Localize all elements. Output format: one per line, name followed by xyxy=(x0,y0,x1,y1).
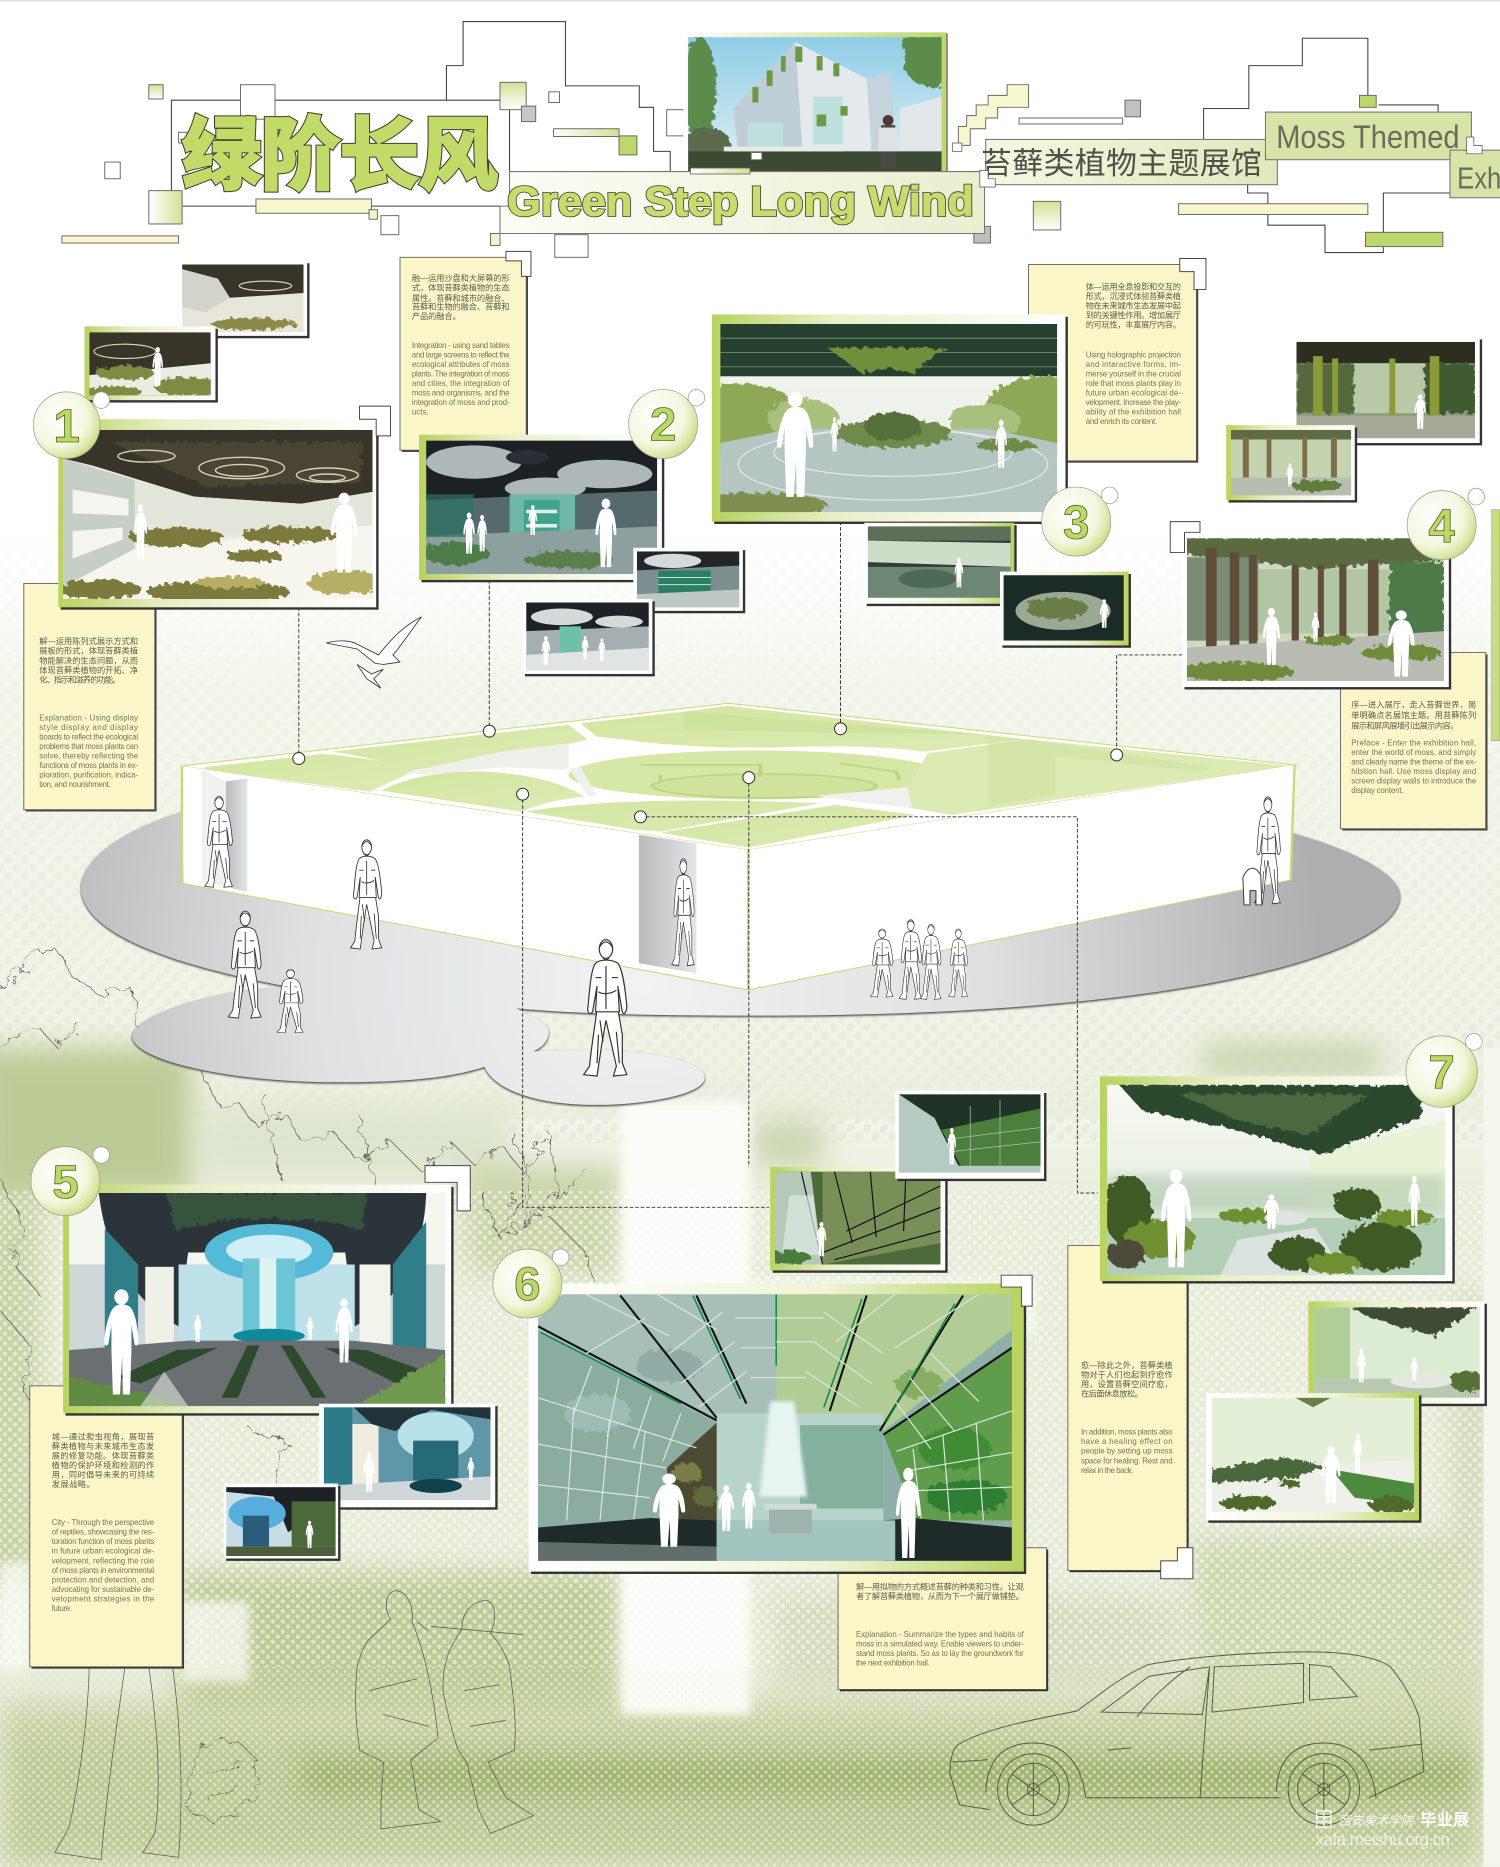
figure: man from behind xyxy=(351,840,382,949)
subtitle: Chinese: 苔藓类植物主题展馆 xyxy=(981,146,1262,181)
panel 2: integration xyxy=(400,251,745,676)
text box 2: integration of moss and prod- xyxy=(412,398,510,407)
text box 3: 的可玩性，丰富展厅内容。 xyxy=(1086,320,1181,330)
subtitle: Moss Themed: Moss Themed xyxy=(1276,119,1460,155)
text box 4: and clearly name the theme of the ex- xyxy=(1351,757,1477,766)
small image: forest hall xyxy=(1292,337,1482,445)
text box 5: toration function of moss plants xyxy=(52,1537,154,1546)
text box 5: of reptiles, showcasing the res- xyxy=(52,1528,155,1537)
corner tab xyxy=(425,1166,470,1211)
text box 5: 藓类植物与未来城市生态发 xyxy=(52,1441,154,1451)
text box 3: role that moss plants play in xyxy=(1086,379,1181,388)
panel 1: explanation xyxy=(24,261,390,811)
text box 5: of moss plants in environmental xyxy=(52,1566,154,1575)
text box 2: 融—运用沙盘和大屏幕的形 xyxy=(412,273,510,283)
line art: bush xyxy=(188,1736,260,1824)
watermark xyxy=(1315,1811,1469,1849)
text box 1: 化、指示和滋养的功能。 xyxy=(39,674,120,684)
title: English: Green Step Long Wind xyxy=(507,178,974,225)
badge 4: 4 xyxy=(1428,500,1455,553)
badge 3 xyxy=(1042,487,1118,556)
text box 7: 愈—除此之外，苔藓类植 xyxy=(1081,1360,1173,1370)
subtitle band: Moss Themed xyxy=(1265,112,1471,160)
walls xyxy=(182,765,1295,990)
badge 7 xyxy=(1406,1034,1482,1107)
text box 3: and enrich its content. xyxy=(1086,417,1157,426)
badge 4 xyxy=(1407,488,1485,560)
text box 1: 物能解决的生态问题，从而 xyxy=(39,655,138,665)
badge 6: 6 xyxy=(514,1258,541,1311)
subtitle band: Chinese xyxy=(986,139,1277,185)
badge 2: 2 xyxy=(650,399,676,452)
line art: car xyxy=(950,1652,1424,1825)
text box 5: in future urban ecological de- xyxy=(52,1547,155,1556)
title band: English xyxy=(500,172,985,234)
text box 6: 者了解苔藓类植物，从而为下一个展厅做铺垫。 xyxy=(856,1591,1024,1601)
exhibition hall isometric model xyxy=(182,703,1295,990)
title: Chinese: 绿阶长风 xyxy=(182,111,498,199)
text box 3: Using holographic projection xyxy=(1086,350,1181,359)
figure: woman in doorway xyxy=(672,859,694,966)
small image: round bed xyxy=(1000,572,1131,648)
text box 7: In addition, moss plants also xyxy=(1081,1428,1173,1437)
text box 5: advocating for sustainable de- xyxy=(52,1585,155,1594)
panel 7: healing xyxy=(1068,1034,1487,1579)
text box 4: enter the world of moss, and simply xyxy=(1351,748,1476,757)
small image: corridor xyxy=(224,1484,340,1561)
figure: walker at left door xyxy=(205,796,232,887)
text box 2: 苔藓和生物的融合、苔藓和 xyxy=(412,302,510,312)
text box 3: future urban ecological de- xyxy=(1086,388,1181,397)
text box 1: style display and display xyxy=(39,723,138,732)
figure: child xyxy=(277,969,303,1033)
text box 5: velopment, reflecting the role xyxy=(52,1556,155,1565)
text box 3: merse yourself in the crucial xyxy=(1086,369,1181,378)
text box 5 xyxy=(30,1386,184,1669)
corner tab xyxy=(1170,522,1200,553)
text box 3: 体—运用全息投影和交互的 xyxy=(1086,281,1181,291)
text box 3 xyxy=(1029,264,1198,463)
text box 1: tion, and nourishment. xyxy=(39,780,111,789)
small image: gallery xyxy=(179,261,310,338)
text box 5: velopment strategies in the xyxy=(52,1594,155,1603)
text box 7: have a healing effect on xyxy=(1081,1437,1173,1446)
text box 4: 序—进入展厅，走入苔藓世界，简 xyxy=(1351,699,1476,709)
text box 1: ploration, purification, indica- xyxy=(39,771,138,780)
text box 2: and cities, the integration of xyxy=(412,379,510,388)
text box 2: 产品的融合。 xyxy=(412,311,461,321)
line art: two figures with pole xyxy=(356,1591,533,1834)
tree line art xyxy=(0,947,595,1512)
text box 5: 用，同时倡导未来的可持续 xyxy=(52,1470,154,1480)
small image: sand table xyxy=(633,548,745,613)
text box 2: and large screens to reflect the xyxy=(412,350,510,359)
text box 3: ability of the exhibition hall xyxy=(1086,407,1181,416)
text box 7: space for healing. Rest and xyxy=(1081,1456,1173,1465)
text box 7: relax in the back. xyxy=(1081,1466,1133,1475)
corner tab xyxy=(1161,1548,1193,1579)
watermark: 毕业展 xyxy=(1420,1811,1469,1829)
small image: white room xyxy=(1308,1301,1487,1406)
panel 6: explanation greenhouse xyxy=(493,1091,1048,1691)
foreground line drawings xyxy=(55,1591,1424,1860)
text box 2: ecological attributes of moss xyxy=(412,360,510,369)
text box 6 xyxy=(838,1548,1048,1691)
small image: moss lounge xyxy=(1206,1393,1421,1523)
badge 5: 5 xyxy=(52,1156,79,1209)
watermark: 西安美术学院 xyxy=(1338,1814,1416,1828)
figure: man with dog xyxy=(1243,797,1280,905)
text box 5: protection and detection, and xyxy=(52,1575,154,1584)
panel 5: city xyxy=(30,1147,498,1669)
watermark: xafa.meishu.org.cn xyxy=(1315,1829,1450,1849)
text box 2: Integration - using sand tables xyxy=(412,341,510,350)
dashed leader lines xyxy=(293,522,1182,1207)
small image: greenhouse detail xyxy=(768,1167,948,1273)
text box 5: future. xyxy=(52,1604,72,1613)
subtitle band: Exhibition xyxy=(1450,150,1500,198)
corner tab xyxy=(1180,258,1206,289)
text box 1: functions of moss plants in ex- xyxy=(39,761,138,770)
small image: column walk xyxy=(1226,425,1357,503)
image: main hall 6 xyxy=(529,1284,1026,1574)
figure: children group xyxy=(871,920,968,999)
image: main hall 4 xyxy=(1175,534,1451,689)
corner tab xyxy=(506,251,531,276)
text box 3: velopment. Increase the play- xyxy=(1086,398,1181,407)
image: main hall 7 xyxy=(1100,1076,1455,1284)
text box 6: 解—用拟物的方式概述苔藓的种类和习性。让观 xyxy=(856,1581,1024,1591)
text box 1: solve, thereby reflecting the xyxy=(39,751,139,760)
small image: greenhouse wall xyxy=(895,1091,1046,1181)
roof plan xyxy=(182,703,1295,850)
text box 5: 植物的保护环境和检测的作 xyxy=(52,1460,154,1470)
text box 1: boards to reflect the ecological xyxy=(39,732,138,741)
text box 1: problems that moss plants can xyxy=(39,742,138,751)
badge 1: 1 xyxy=(53,400,80,453)
panel 4: preface xyxy=(1170,337,1500,831)
text box 6: stand moss plants. So as to lay the groundwork for xyxy=(856,1649,1024,1658)
text box 6: the next exhibition hall. xyxy=(856,1659,930,1668)
birds xyxy=(326,617,421,688)
corner tab xyxy=(1001,1275,1032,1306)
badge 5 xyxy=(31,1147,110,1216)
text box 5: 发展战略。 xyxy=(52,1479,95,1489)
text box 1: 展板的形式，体现苔藓类植 xyxy=(39,646,138,656)
line art: person left xyxy=(55,1667,181,1860)
text box 4: 展示和屏风展墙引出展示内容。 xyxy=(1351,721,1458,731)
image: main hall 3 xyxy=(685,314,1101,524)
text box 2: 式，体现苔藓类植物的生态 xyxy=(412,283,510,293)
badge 1 xyxy=(33,392,110,458)
text box 4: 单明确点名展馆主题。用苔藓陈列 xyxy=(1351,710,1476,720)
corner tab xyxy=(360,406,390,436)
text box 3: 到的关键性作用。增加展厅 xyxy=(1086,310,1181,320)
text box 6: moss in a simulated way. Enable viewers to under- xyxy=(856,1640,1024,1649)
text box 1: 体现苔藓类植物的开拓、净 xyxy=(39,665,138,675)
header photo: building xyxy=(683,32,961,173)
text box 3: 物在未来城市生态发展中起 xyxy=(1086,301,1181,311)
text box 6: Explanation - Summarize the types and habits of xyxy=(856,1630,1025,1639)
title accents xyxy=(690,137,1482,187)
text box 4: display content. xyxy=(1351,786,1404,795)
ground platform xyxy=(81,810,1400,1105)
small image: sand table detail xyxy=(523,599,655,676)
text box 3: 形式，沉浸式体验苔藓类植 xyxy=(1086,291,1181,301)
text box 5: City - Through the perspective xyxy=(52,1518,155,1527)
badge 6 xyxy=(493,1249,569,1318)
text box 4 xyxy=(1340,653,1488,831)
badge 3: 3 xyxy=(1063,496,1089,549)
text box 4: hibition hall. Use moss display and xyxy=(1351,767,1476,776)
text box 3: and interactive forms, im- xyxy=(1086,360,1181,369)
figure: man walking xyxy=(584,940,627,1076)
text box 2: ucts. xyxy=(412,407,429,416)
text box 5: 城—通过爬虫视角，展现苔 xyxy=(52,1431,154,1441)
title frame lines xyxy=(171,22,1450,253)
panel 3: immersion xyxy=(685,258,1206,648)
small image: dark hall xyxy=(864,523,1017,606)
text box 1 xyxy=(24,584,157,811)
image: main hall 1 xyxy=(56,419,387,610)
green side strip xyxy=(1492,510,1500,741)
title: Chinese: 绿阶长风 xyxy=(182,111,498,199)
figure: man standing xyxy=(228,911,261,1018)
badge 7: 7 xyxy=(1428,1046,1455,1099)
text box 4: Preface - Enter the exhibition hall, xyxy=(1351,738,1476,747)
text box 7: 用，设置苔藓空间疗愈， xyxy=(1081,1379,1173,1389)
text box 2: 属性。苔藓和城市的融合、 xyxy=(412,293,510,303)
text box 2: plants. The integration of moss xyxy=(412,369,510,378)
image: main hall 2 xyxy=(419,435,664,582)
text box 1: Explanation - Using display xyxy=(39,713,138,722)
text box 7: 在后面休息放松。 xyxy=(1081,1389,1143,1399)
text box 7 xyxy=(1068,1245,1189,1572)
title: English: Green Step Long Wind xyxy=(507,178,974,225)
text box 2 xyxy=(400,257,528,452)
model figures xyxy=(205,796,1280,1076)
image: main hall 5 xyxy=(63,1185,454,1416)
small image: blue pavilion xyxy=(319,1404,498,1510)
text box 7: 物对于人们也起到疗愈作 xyxy=(1081,1370,1173,1380)
text box 7: people by setting up moss xyxy=(1081,1447,1173,1456)
text box 5: 展的修复功能。体现苔藓类 xyxy=(52,1451,154,1461)
text box 2: moss and organisms, and the xyxy=(412,388,510,397)
small image: moss hall xyxy=(85,326,226,403)
decorative title blocks xyxy=(62,82,1443,257)
text box 4: screen display walls to introduce the xyxy=(1351,776,1477,785)
badge 2 xyxy=(629,389,705,458)
text box 1: 解—运用陈列式展示方式和 xyxy=(39,636,138,646)
